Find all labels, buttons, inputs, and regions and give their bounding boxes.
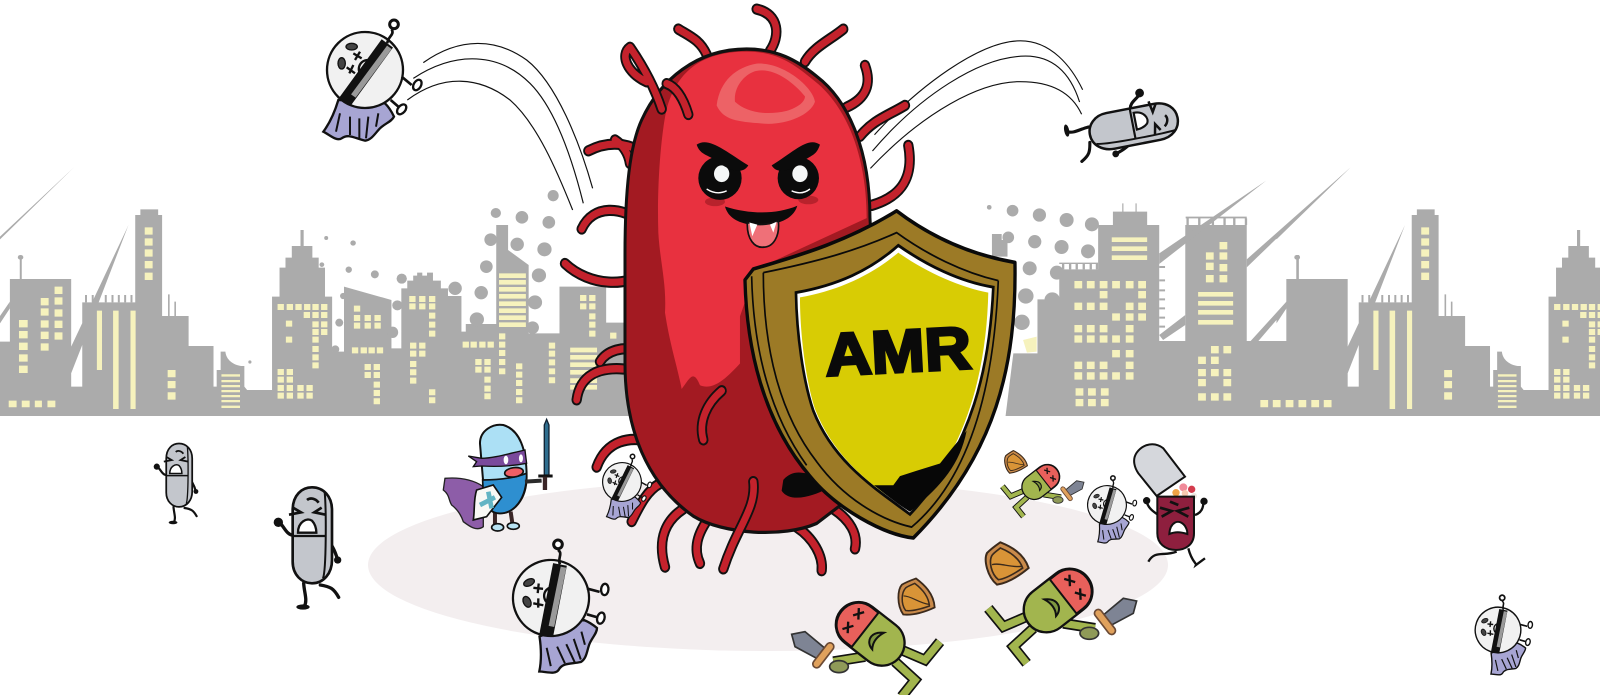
running grey pill large [274,487,341,610]
knight pill with sword and shield [443,419,553,531]
jump arcs: right [870,41,1083,168]
skyline: right city [1276,167,1600,416]
flying grey pill [1059,83,1183,166]
shield face [796,245,993,514]
dead green pill small [1002,459,1084,516]
broken dark red pill [1134,444,1208,565]
KO pill far right [1463,588,1548,679]
running grey pill small [154,444,198,524]
ground ellipse [368,479,1168,651]
dark patch near shield [782,473,827,498]
shield scorch [874,431,967,512]
KO pill right of ground [1078,471,1147,546]
broken shield middle [893,575,941,622]
shield label AMR: AMR [823,314,973,389]
bacterium body [625,49,883,532]
skyline: middle right city [987,167,1351,416]
AMR bacterium [565,9,910,571]
flagella behind body [565,9,910,571]
flying KO round pill [323,20,423,141]
dead green pill left [792,593,940,695]
AMR shield [745,211,1015,538]
skyline: dots left [248,190,559,364]
KO pill foreground [492,528,634,680]
body highlight [658,52,867,389]
face [697,142,820,247]
KO pill on flagellum [597,452,658,521]
jump arcs: left [407,43,593,210]
flagella over body [625,47,754,569]
broken shield small [1004,450,1029,475]
skyline: left city [0,167,633,416]
dead green pill right [988,560,1137,663]
shield rim [745,211,1015,538]
top shine [717,64,815,124]
broken shield large [986,542,1029,585]
